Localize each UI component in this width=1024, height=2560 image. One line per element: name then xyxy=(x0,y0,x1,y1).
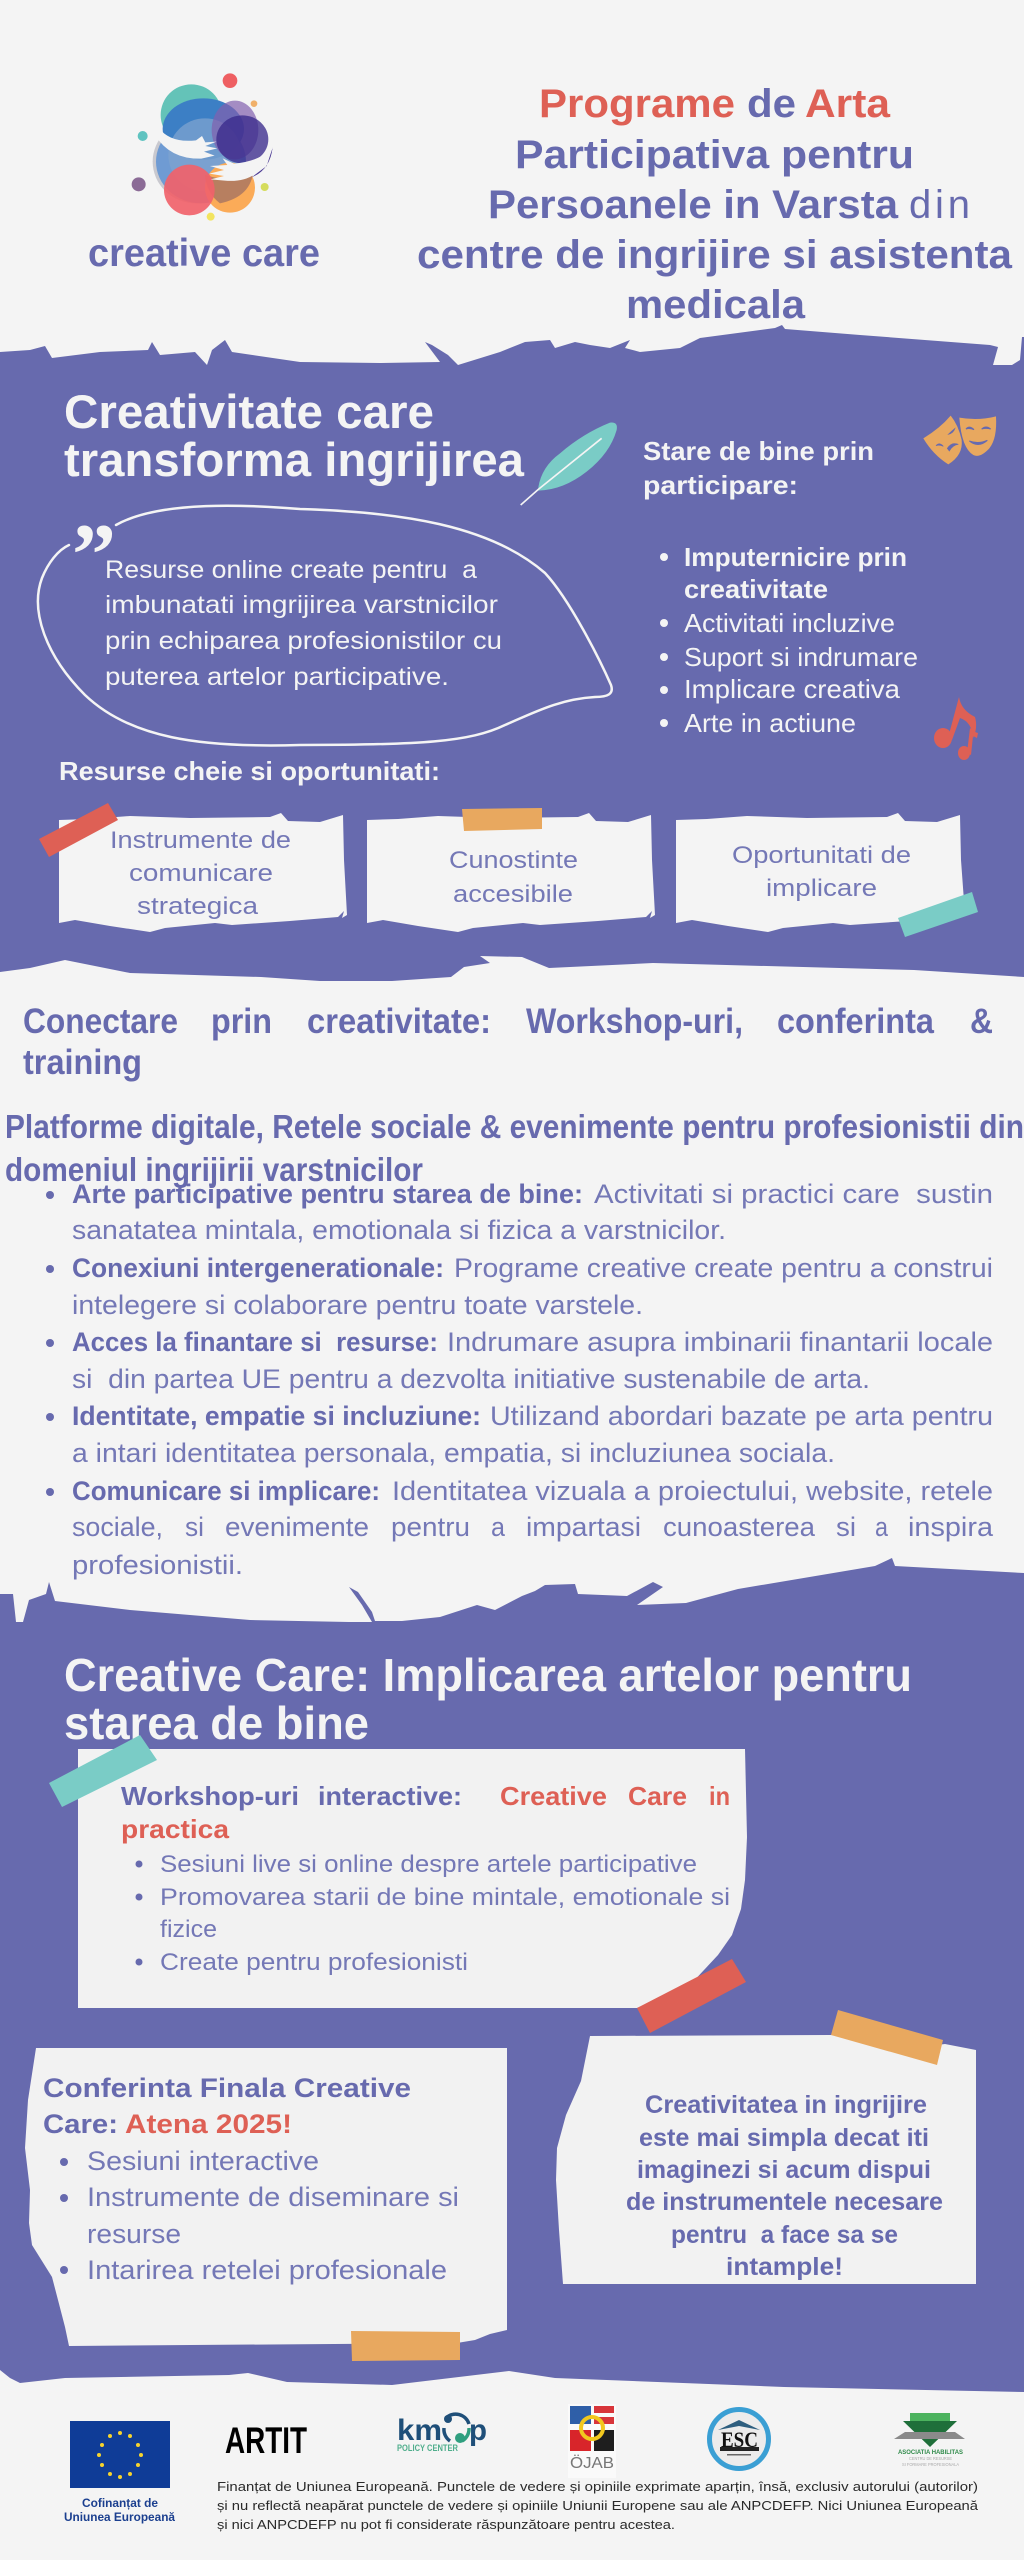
heading: creativitate care transforma ingrijirea xyxy=(64,385,525,486)
icon: theatre masks xyxy=(923,416,996,464)
list: workshop topics: sociale, xyxy=(72,1512,163,1542)
card: conferinta finala xyxy=(25,2048,507,2361)
card heading: Atena 2025! xyxy=(125,2109,292,2139)
list: workshop topics: profesionistii. xyxy=(72,1550,243,1580)
card heading: interactive: xyxy=(318,1781,462,1811)
heading: conectare prin creativitate: training xyxy=(23,1043,142,1082)
logo: Habilitas: CENTRU DE RESURSE xyxy=(909,2456,952,2461)
list: workshop topics: pentru xyxy=(391,1512,470,1542)
callout text: Creativitatea in ingrijire xyxy=(645,2091,927,2119)
card list xyxy=(136,1851,730,1976)
card: instrumente de comunicare strategica: Instrumente de xyxy=(110,827,291,854)
list: workshop topics: intelegere si colaborare pentru toate varstele. xyxy=(72,1290,643,1320)
title: Programe xyxy=(539,82,735,126)
logo: EU co-funding xyxy=(64,2421,176,2524)
card heading: Workshop-uri xyxy=(121,1781,299,1811)
list: workshop topics: Arte participative pentru starea de bine: xyxy=(72,1179,583,1209)
bubble text xyxy=(105,556,502,691)
card list: Sesiuni live si online despre artele participative xyxy=(160,1851,697,1878)
title: centre de ingrijire si asistenta xyxy=(417,233,1013,277)
icon: music notes xyxy=(934,697,978,760)
title: medicala xyxy=(626,283,806,327)
list: workshop topics: cunoasterea xyxy=(663,1512,816,1542)
card: cunostinte accesibile: accesibile xyxy=(453,881,573,908)
list: workshop topics xyxy=(46,1179,994,1580)
heading: creative care implicarea artelor: starea de bine xyxy=(64,1697,369,1749)
heading: conectare prin creativitate: Conectare xyxy=(23,1002,178,1041)
logo: Habilitas xyxy=(894,2413,965,2467)
heading: conectare prin creativitate xyxy=(23,1002,993,1082)
logo: Habilitas: ASOCIATIA HABILITAS xyxy=(898,2449,964,2456)
callout text: de instrumentele necesare xyxy=(626,2188,943,2216)
heading: creative care implicarea artelor: Creative Care: Implicarea artelor pentru xyxy=(64,1649,912,1701)
logo: KMOP policy center: POLICY CENTER xyxy=(397,2443,458,2453)
tape: orange xyxy=(831,2010,943,2065)
callout text: intample! xyxy=(726,2253,843,2281)
list: workshop topics: sanatatea mintala, emotionala si fizica a varstnicilor. xyxy=(72,1215,726,1245)
card heading: Creative xyxy=(500,1781,607,1811)
title: de xyxy=(747,82,796,126)
list: workshop topics: inspira xyxy=(908,1512,994,1542)
tape: orange xyxy=(462,808,542,831)
panel: purple torn band, creativity section xyxy=(0,325,1024,981)
list: workshop topics: a xyxy=(875,1512,889,1542)
disclaimer text: Finanțat de Uniunea Europeană. Punctele de vedere și opiniile exprimate aparțin, însă, exclusiv autorului (autorilor) xyxy=(217,2479,978,2494)
card heading: Care xyxy=(628,1781,687,1811)
logo: KMOP policy center: p xyxy=(469,2414,487,2447)
list: workshop topics: evenimente xyxy=(225,1512,369,1542)
card: instrumente de comunicare strategica: comunicare xyxy=(129,860,273,887)
list: workshop topics: Indrumare asupra imbinarii finantarii locale xyxy=(447,1327,993,1357)
card list: Promovarea starii de bine mintale, emotionale si xyxy=(160,1884,730,1911)
card heading: Conferinta Finala Creative xyxy=(43,2073,411,2103)
card list: Sesiuni interactive xyxy=(87,2146,319,2176)
card: instrumente de comunicare strategica xyxy=(39,803,347,932)
logo wordmark: creative care xyxy=(88,232,320,275)
subheading: stare de bine prin participare xyxy=(643,436,874,500)
heading: conectare prin creativitate: prin xyxy=(211,1002,272,1041)
quote mark: ” xyxy=(72,507,116,604)
bubble outline xyxy=(38,506,612,745)
disclaimer text xyxy=(217,2479,979,2532)
callout text xyxy=(626,2091,943,2281)
card: creativitatea in ingrijire xyxy=(556,2010,976,2284)
card heading xyxy=(43,2073,411,2139)
list: wellbeing through participation xyxy=(660,542,918,738)
list: workshop topics: Identitatea vizuala a proiectului, website, retele xyxy=(392,1476,993,1506)
heading: conectare prin creativitate: conferinta xyxy=(777,1002,934,1041)
list: workshop topics: impartasi xyxy=(526,1512,641,1542)
title: Persoanele in Varsta xyxy=(488,183,899,227)
icon: feather xyxy=(521,423,617,505)
logo: KMOP policy center xyxy=(397,2414,487,2453)
logo: creative care xyxy=(88,73,320,275)
callout text: este mai simpla decat iti xyxy=(639,2124,929,2152)
card heading: practica xyxy=(121,1814,230,1844)
list: workshop topics: si xyxy=(836,1512,856,1542)
heading: platforme digitale xyxy=(5,1108,1024,1188)
logo: OJAB: ÖJAB xyxy=(570,2454,614,2472)
title: Arta xyxy=(805,82,891,126)
list: wellbeing through participation: Activitati incluzive xyxy=(684,608,895,638)
speech bubble with quote xyxy=(38,506,612,745)
list: workshop topics: Acces la finantare si resurse: xyxy=(72,1327,438,1357)
card list: Intarirea retelei profesionale xyxy=(87,2255,447,2285)
card: oportunitati de implicare: implicare xyxy=(766,875,877,902)
bubble text: imbunatati imgrijirea varstnicilor xyxy=(105,591,498,619)
logo: ESC xyxy=(710,2410,768,2468)
title: Participativa pentru xyxy=(515,133,914,177)
card: instrumente de comunicare strategica: strategica xyxy=(137,893,259,920)
logo mark: embracing hands with coloured circles xyxy=(132,73,273,221)
bubble text: Resurse online create pentru a xyxy=(105,556,477,584)
tape: red xyxy=(39,803,118,857)
list: wellbeing through participation: creativitate xyxy=(684,574,828,604)
list: workshop topics: si din partea UE pentru a dezvolta initiative sustenabile de arta. xyxy=(72,1364,870,1394)
bubble text: puterea artelor participative. xyxy=(105,663,449,691)
heading: conectare prin creativitate: creativitate: xyxy=(307,1002,491,1041)
title: din xyxy=(909,183,970,227)
list: workshop topics: Conexiuni intergenerationale: xyxy=(72,1253,444,1283)
list: wellbeing through participation: Suport si indrumare xyxy=(684,642,918,672)
list: workshop topics: Activitati si practici care sustin xyxy=(594,1179,993,1209)
logo: EU co-funding: Cofinanțat de xyxy=(82,2498,158,2510)
callout text: pentru a face sa se xyxy=(671,2221,898,2249)
logo: OJAB xyxy=(568,2404,616,2478)
tape: red xyxy=(637,1959,746,2033)
list: workshop topics: si xyxy=(185,1512,204,1542)
logo: KMOP policy center: km xyxy=(397,2414,442,2447)
card list xyxy=(60,2146,459,2285)
heading: conectare prin creativitate: Workshop-uri, xyxy=(526,1002,743,1041)
card: workshop-uri interactive xyxy=(49,1735,747,2033)
heading: platforme digitale: domeniul ingrijirii varstnicilor xyxy=(5,1151,423,1188)
tape: orange xyxy=(351,2331,460,2361)
subheading: stare de bine prin participare: Stare de bine prin xyxy=(643,436,874,466)
heading: resurse cheie si oportunitati: Resurse cheie si oportunitati: xyxy=(59,756,440,786)
card heading: in xyxy=(709,1781,730,1811)
disclaimer text: și nu reflectă neapărat punctele de vedere și opiniile Uniunii Europene sau ale ANPCDEFP. Nici Uniunea Europeană xyxy=(217,2498,979,2513)
heading: creativitate care transforma ingrijirea: Creativitate care xyxy=(64,385,434,438)
card: oportunitati de implicare: Oportunitati de xyxy=(732,842,911,869)
logo: EU co-funding: Uniunea Europeană xyxy=(64,2512,176,2524)
tape: teal xyxy=(898,892,978,937)
logo: ARTIT: ARTIT xyxy=(225,2420,307,2461)
subheading: stare de bine prin participare: participare: xyxy=(643,470,798,500)
card: cunostinte accesibile xyxy=(367,808,655,932)
list: workshop topics: Identitate, empatie si incluziune: xyxy=(72,1401,481,1431)
list: wellbeing through participation: Implicare creativa xyxy=(684,674,901,704)
list: workshop topics: Comunicare si implicare: xyxy=(72,1476,380,1506)
card heading: Care: xyxy=(43,2109,118,2139)
bubble text: prin echiparea profesionistilor cu xyxy=(105,627,502,655)
list: workshop topics: Programe creative create pentru a construi xyxy=(454,1253,993,1283)
card list: fizice xyxy=(160,1916,217,1943)
card list: Instrumente de diseminare si xyxy=(87,2182,459,2212)
card list: resurse xyxy=(87,2219,181,2249)
disclaimer text: și nici ANPCDEFP nu pot fi considerate răspunzătoare pentru acestea. xyxy=(217,2517,675,2532)
card: oportunitati de implicare xyxy=(676,813,978,937)
list: wellbeing through participation: Imputernicire prin xyxy=(684,542,907,572)
list: wellbeing through participation: Arte in actiune xyxy=(684,708,856,738)
card: cunostinte accesibile: Cunostinte xyxy=(449,847,578,874)
list: workshop topics: a xyxy=(491,1512,506,1542)
card heading xyxy=(121,1781,730,1844)
list: workshop topics: Utilizand abordari bazate pe arta pentru xyxy=(490,1401,993,1431)
heading: creativitate care transforma ingrijirea: transforma ingrijirea xyxy=(64,433,525,486)
callout text: imaginezi si acum dispui xyxy=(637,2156,931,2184)
list: workshop topics: a intari identitatea personala, empatia, si incluziunea sociala. xyxy=(72,1438,835,1468)
heading: conectare prin creativitate: & xyxy=(970,1002,993,1041)
logo: ESC: ESC xyxy=(721,2427,758,2452)
title xyxy=(417,82,1013,327)
heading: creative care implicarea artelor xyxy=(64,1649,912,1749)
panel: purple torn band, implicarea artelor section xyxy=(0,1558,1024,2392)
logo: Habilitas: SI FORMARE PROFESIONALA xyxy=(902,2462,959,2467)
tape: teal xyxy=(49,1735,157,1807)
card list: Create pentru profesionisti xyxy=(160,1949,468,1976)
